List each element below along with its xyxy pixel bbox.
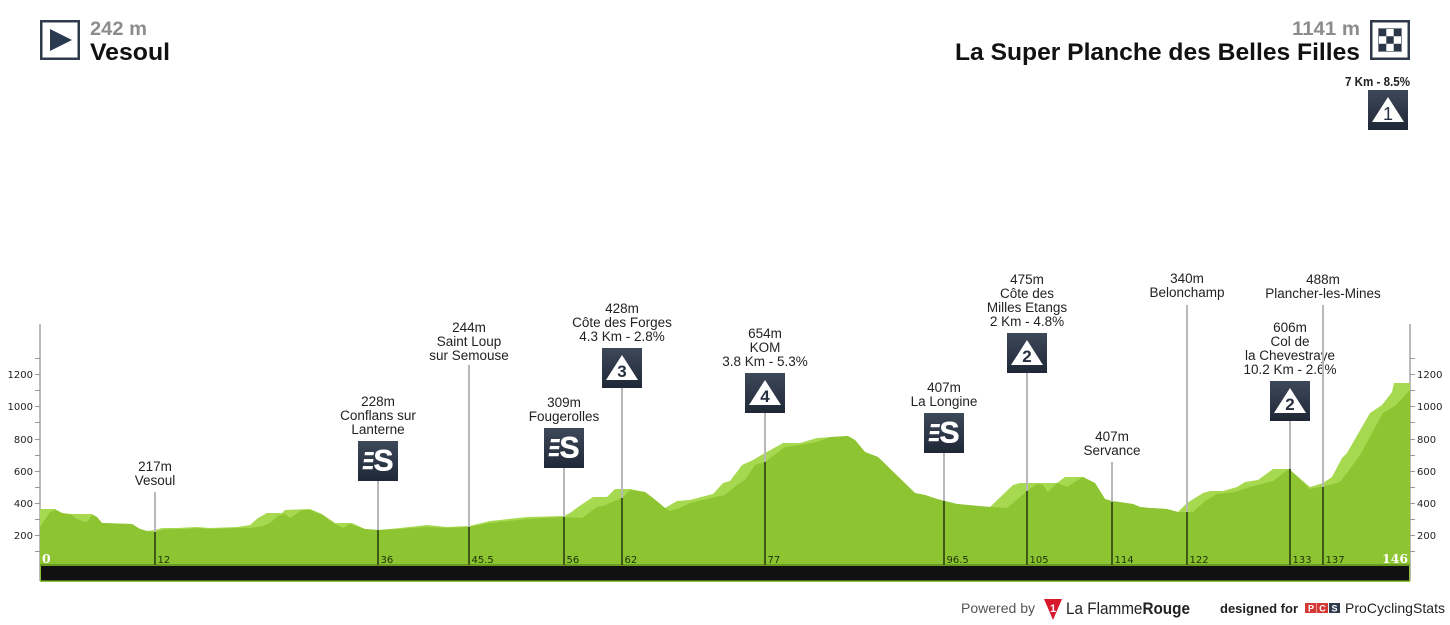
marker: km 36 Conflans sur Lanterne: S xyxy=(373,444,394,478)
marker: km 137 Plancher-les-Mines: 488m xyxy=(1306,272,1340,287)
right axis: 200 xyxy=(1417,531,1436,542)
marker: km 77 KOM: KOM xyxy=(750,340,780,355)
marker: km 45.5 Saint Loup: Saint Loup xyxy=(437,334,501,349)
elevation profile xyxy=(40,383,1410,566)
start icon xyxy=(41,21,79,59)
finish icon xyxy=(1371,21,1409,59)
final climb label: 7 Km - 8.5% xyxy=(1345,75,1410,89)
marker: km 105 Côte des Milles Etangs: 475m xyxy=(1010,272,1044,287)
finish town: La Super Planche des Belles Filles xyxy=(955,39,1360,66)
marker: km 96.5 La Longine: 407m xyxy=(927,380,961,395)
marker: km 36 Conflans sur Lanterne xyxy=(340,394,416,566)
profile: main layer xyxy=(40,390,1410,566)
icon: La Flamme Rouge flag xyxy=(1044,599,1062,620)
finish elevation: 1141 m xyxy=(1292,19,1360,40)
marker: km 122 Belonchamp xyxy=(1149,271,1225,566)
finish km: 146 xyxy=(1382,551,1408,566)
marker: km 12 Vesoul: Vesoul xyxy=(135,473,175,488)
marker: km 36 Conflans sur Lanterne: 228m xyxy=(361,394,395,409)
marker: km 114 Servance: 407m xyxy=(1095,429,1129,444)
marker: km 105 Côte des Milles Etangs xyxy=(987,272,1067,566)
left axis: 1200 xyxy=(8,370,33,381)
marker: km 105 Côte des Milles Etangs: Côte des xyxy=(1000,286,1054,301)
icon: category 1 climb xyxy=(1368,90,1408,130)
marker: km 62 Côte des Forges: 3 xyxy=(617,362,627,381)
start town: Vesoul xyxy=(90,39,170,66)
icon: La Flamme Rouge flag: 1 xyxy=(1050,603,1056,615)
left axis xyxy=(8,324,40,581)
marker: km 133 Col de la Chevestraye: Col de xyxy=(1270,334,1310,349)
marker: km 133 Col de la Chevestraye: 2 xyxy=(1285,395,1295,414)
start km: 0 xyxy=(42,551,51,566)
marker: km 105 Côte des Milles Etangs: 2 Km - 4.8% xyxy=(990,314,1064,329)
icon: PCS logo: P xyxy=(1308,604,1314,614)
right axis xyxy=(1410,324,1442,581)
marker: km 62 Côte des Forges: 428m xyxy=(605,301,639,316)
footer: powered by: Powered by xyxy=(961,600,1035,616)
marker: km 36 Conflans sur Lanterne: 36 xyxy=(380,555,393,566)
marker: km 96.5 La Longine: S xyxy=(939,416,960,450)
marker: km 96.5 La Longine: 96.5 xyxy=(946,555,969,566)
marker: km 133 Col de la Chevestraye: la Chevestraye xyxy=(1245,348,1335,363)
icon: PCS logo xyxy=(1305,603,1340,614)
road bar xyxy=(40,564,1410,582)
marker: km 96.5 La Longine: La Longine xyxy=(911,394,977,409)
right axis: 400 xyxy=(1417,499,1436,510)
marker: km 122 Belonchamp: 122 xyxy=(1190,555,1209,566)
right axis: 1200 xyxy=(1417,370,1442,381)
marker: km 77 KOM: 77 xyxy=(768,555,780,566)
footer: ProCyclingStats: ProCyclingStats xyxy=(1345,600,1445,616)
marker: km 45.5 Saint Loup: 45.5 xyxy=(472,555,494,566)
marker: km 56 Fougerolles: S xyxy=(559,432,580,464)
marker: km 77 KOM xyxy=(722,326,808,566)
marker: km 62 Côte des Forges: 62 xyxy=(624,555,637,566)
marker: km 56 Fougerolles: Fougerolles xyxy=(529,409,600,424)
icon: category 1 climb: 1 xyxy=(1383,104,1393,124)
marker: km 12 Vesoul xyxy=(135,459,175,566)
footer: designed for: designed for xyxy=(1220,601,1298,616)
marker: km 77 KOM: 654m xyxy=(748,326,782,341)
marker: km 36 Conflans sur Lanterne: Lanterne xyxy=(351,422,405,437)
start elevation: 242 m xyxy=(90,19,147,40)
marker: km 105 Côte des Milles Etangs: 2 xyxy=(1022,347,1032,366)
marker: km 56 Fougerolles: 309m xyxy=(547,395,581,410)
profile: light upper layer xyxy=(40,383,1410,566)
marker: km 114 Servance: Servance xyxy=(1083,443,1141,458)
left axis: 600 xyxy=(14,467,33,478)
marker: km 122 Belonchamp: 340m xyxy=(1170,271,1204,286)
left axis: 800 xyxy=(14,435,33,446)
marker: km 62 Côte des Forges xyxy=(572,301,672,566)
marker: km 12 Vesoul: 217m xyxy=(138,459,172,474)
marker: km 137 Plancher-les-Mines: 137 xyxy=(1326,555,1345,566)
left axis: 200 xyxy=(14,531,33,542)
marker: km 77 KOM: 4 xyxy=(760,387,770,406)
marker: km 133 Col de la Chevestraye: 606m xyxy=(1273,320,1307,335)
marker: km 114 Servance xyxy=(1083,429,1141,566)
marker: km 114 Servance: 114 xyxy=(1114,555,1134,566)
marker: km 45.5 Saint Loup: 244m xyxy=(452,320,486,335)
left axis: 1000 xyxy=(8,402,33,413)
marker: km 62 Côte des Forges: Côte des Forges xyxy=(572,315,672,330)
marker: km 36 Conflans sur Lanterne: Conflans sur xyxy=(340,408,416,423)
marker: km 105 Côte des Milles Etangs: 105 xyxy=(1030,555,1049,566)
marker: km 122 Belonchamp: Belonchamp xyxy=(1149,285,1225,300)
footer: La Flamme Rouge: La FlammeRouge xyxy=(1066,600,1190,618)
marker: km 62 Côte des Forges: 4.3 Km - 2.8% xyxy=(579,329,665,344)
marker: km 56 Fougerolles: 56 xyxy=(566,555,579,566)
marker: km 133 Col de la Chevestraye xyxy=(1243,320,1337,566)
icon: PCS logo: C xyxy=(1319,604,1326,614)
marker: km 133 Col de la Chevestraye: 133 xyxy=(1292,555,1312,566)
marker: km 105 Côte des Milles Etangs: Milles Etangs xyxy=(987,300,1067,315)
marker: km 137 Plancher-les-Mines xyxy=(1265,272,1381,566)
right axis: 800 xyxy=(1417,435,1436,446)
marker: km 133 Col de la Chevestraye: 10.2 Km - 2.6% xyxy=(1243,362,1337,377)
marker: km 96.5 La Longine xyxy=(911,380,977,566)
left axis: 400 xyxy=(14,499,33,510)
right axis: 1000 xyxy=(1417,402,1442,413)
marker: km 45.5 Saint Loup xyxy=(429,320,509,566)
marker: km 137 Plancher-les-Mines: Plancher-les-Mines xyxy=(1265,286,1381,301)
marker: km 56 Fougerolles xyxy=(529,395,600,566)
marker: km 12 Vesoul: 12 xyxy=(158,555,170,566)
marker: km 45.5 Saint Loup: sur Semouse xyxy=(429,348,509,363)
marker: km 77 KOM: 3.8 Km - 5.3% xyxy=(722,354,808,369)
right axis: 600 xyxy=(1417,467,1436,478)
icon: PCS logo: S xyxy=(1331,604,1338,614)
